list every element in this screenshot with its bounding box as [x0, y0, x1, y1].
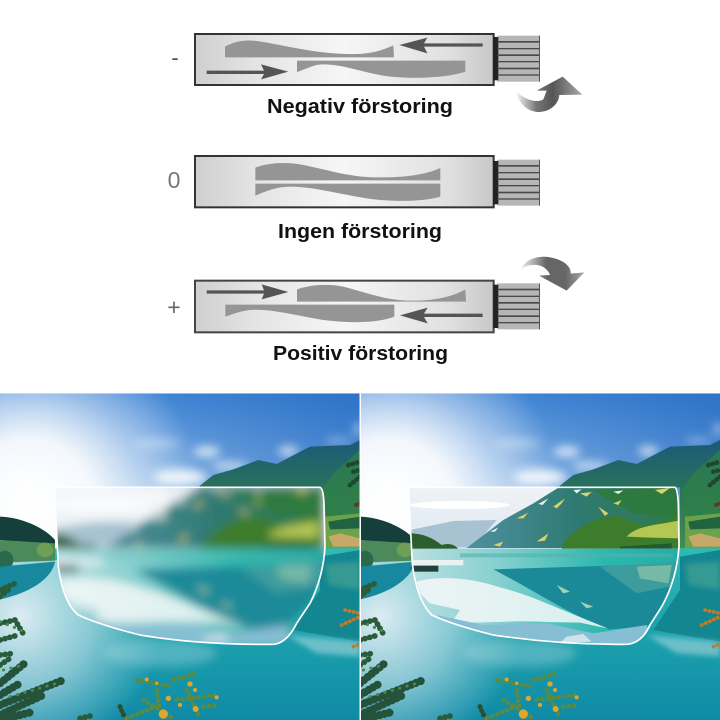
diagram: positive magnification: [195, 257, 584, 332]
lower lens element: [255, 184, 440, 201]
blurred lens view: [56, 488, 324, 644]
arrow: right: [207, 284, 288, 299]
upper lens element: [225, 41, 394, 57]
adjustment knob: [493, 36, 540, 82]
heading: negative magnification: Negativ förstoring: [267, 96, 453, 118]
diagram: negative magnification: [195, 34, 582, 112]
lens outline: [408, 487, 679, 644]
lower lens element: [225, 305, 394, 322]
upper lens element: [255, 163, 440, 180]
arrow: clockwise rotation: [521, 257, 584, 291]
photo: lake seen through sharp lens: [357, 393, 720, 720]
label: plus sign: +: [167, 294, 181, 320]
diagram: no magnification: [195, 156, 540, 207]
tube body: [195, 281, 494, 332]
lens outline: [54, 487, 325, 644]
arrow: counter-clockwise rotation: [517, 77, 582, 112]
heading: no magnification: Ingen förstoring: [278, 221, 442, 243]
arrow: left: [400, 308, 483, 323]
heading: positive magnification: Positiv förstoring: [273, 343, 448, 365]
upper lens element: [297, 285, 466, 302]
arrow: right: [207, 64, 288, 79]
adjustment knob: [493, 283, 540, 329]
label: zero: 0: [168, 167, 180, 193]
lower lens element: [297, 61, 465, 78]
label: minus sign: -: [171, 45, 179, 70]
photo: lake seen through blurred lens: [0, 393, 363, 720]
arrow: left: [399, 38, 483, 53]
adjustment knob: [493, 160, 540, 206]
sharp lens view: [410, 488, 678, 644]
tube body: [195, 34, 494, 85]
tube body: [195, 156, 494, 207]
